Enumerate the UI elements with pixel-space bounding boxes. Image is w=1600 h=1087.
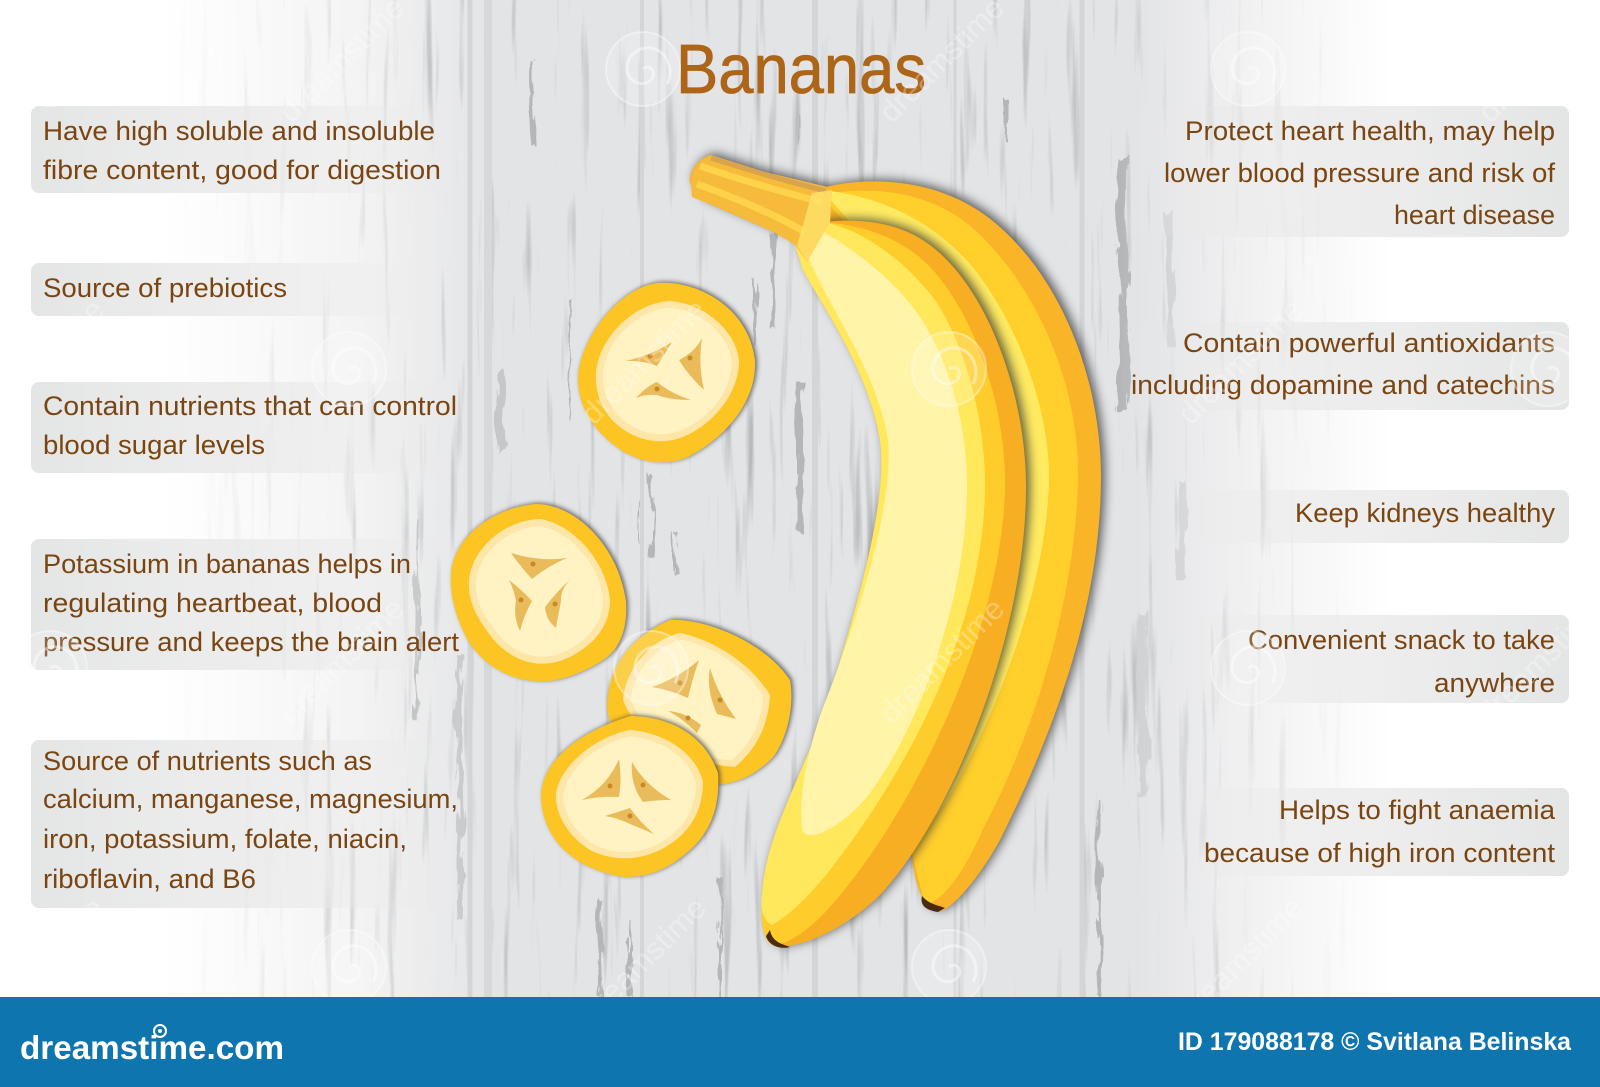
panel: benefit potassium: Potassium in bananas helps in	[43, 549, 411, 579]
icon: back banana	[690, 155, 1101, 912]
icon: banana slice back	[607, 620, 791, 786]
icon: banana slice front	[541, 716, 718, 877]
panel: benefit fibre	[31, 106, 461, 193]
footer bar	[0, 997, 1600, 1087]
panel: benefit prebiotics: Source of prebiotics	[43, 273, 287, 303]
watermark spirals and marks: dreamstime	[1171, 890, 1310, 1029]
panel: benefit potassium	[31, 539, 461, 670]
panel: benefit antioxidants: Contain powerful antioxidants	[1183, 328, 1555, 358]
panel: benefit kidneys: Keep kidneys healthy	[1295, 498, 1556, 528]
watermark spirals and marks: dreamstime	[272, 591, 411, 730]
panel: benefit anaemia: Helps to fight anaemia	[1279, 795, 1556, 825]
panel: benefit potassium: pressure and keeps the brain alert	[43, 627, 460, 657]
wood background	[220, 0, 1344, 997]
panel: benefit blood sugar: Contain nutrients that can control	[43, 391, 457, 421]
panel: benefit antioxidants: including dopamine and catechins	[1131, 370, 1555, 400]
title: Bananas	[676, 30, 926, 108]
icon: front banana	[761, 221, 1026, 948]
panel: benefit blood sugar	[31, 382, 461, 473]
panel: benefit blood sugar: blood sugar levels	[43, 430, 265, 460]
panel: benefit kidneys	[1170, 490, 1569, 543]
watermark spirals and marks: dreamstime	[574, 292, 713, 431]
panel: benefit fibre: Have high soluble and insoluble	[43, 116, 435, 146]
footer credit: ID 179088178 © Svitlana Belinska	[1178, 1028, 1572, 1056]
watermark spirals and marks: dreamstime	[574, 890, 713, 1029]
panel: benefit heart	[1120, 106, 1569, 237]
icon: banana stem	[691, 157, 832, 262]
panel: benefit prebiotics	[31, 263, 431, 316]
watermark spirals and marks: dreamstime	[1171, 292, 1310, 431]
panel: benefit anaemia: because of high iron content	[1204, 838, 1556, 868]
panel: benefit anaemia	[1170, 788, 1569, 876]
panel: benefit heart: heart disease	[1394, 200, 1555, 230]
footer logo: dreamstime.com	[20, 1029, 284, 1066]
icon: banana slice top	[578, 283, 755, 462]
panel: benefit nutrients: riboflavin, and B6	[43, 864, 256, 894]
watermark spirals and marks: dreamstime	[872, 591, 1011, 730]
panel: benefit snack: anywhere	[1434, 668, 1555, 698]
panel: benefit heart: Protect heart health, may help	[1185, 116, 1555, 146]
panel: benefit nutrients: calcium, manganese, magnesium,	[43, 784, 458, 814]
panel: benefit fibre: fibre content, good for digestion	[43, 155, 441, 185]
panel: benefit antioxidants	[1120, 322, 1569, 410]
panel: benefit snack	[1170, 615, 1569, 703]
panel: benefit snack: Convenient snack to take	[1248, 625, 1555, 655]
panel: benefit nutrients: Source of nutrients such as	[43, 746, 372, 776]
panel: benefit heart: lower blood pressure and risk of	[1164, 158, 1555, 188]
panel: benefit nutrients: iron, potassium, folate, niacin,	[43, 824, 407, 854]
panel: benefit nutrients	[31, 740, 461, 908]
icon: banana slice left	[451, 504, 626, 681]
panel: benefit potassium: regulating heartbeat, blood	[43, 588, 382, 618]
